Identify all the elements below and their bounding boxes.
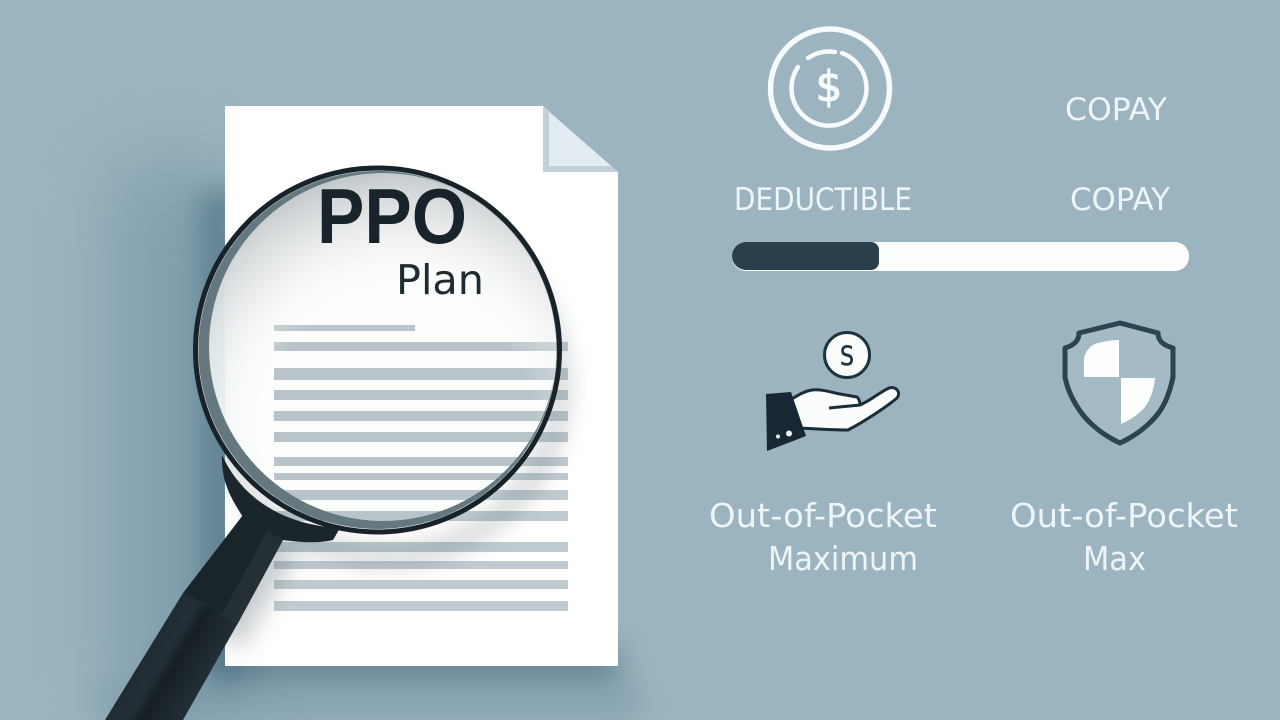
label: copay top: COPAY — [1065, 92, 1167, 128]
label: out-of-pocket max: Out-of-Pocket — [1010, 496, 1238, 535]
icon: dollar coin: $ — [816, 62, 842, 111]
label: out-of-pocket maximum — [709, 496, 937, 578]
title: PPO: PPO — [317, 172, 467, 260]
progress bar — [732, 242, 1189, 271]
label: out-of-pocket maximum: Maximum — [768, 539, 918, 578]
label: copay: COPAY — [1070, 182, 1170, 218]
handle collar — [222, 455, 340, 542]
label: deductible: DEDUCTIBLE — [734, 182, 912, 218]
coin: S — [840, 341, 854, 372]
document page — [225, 106, 618, 666]
folded corner — [543, 106, 618, 172]
label: out-of-pocket maximum: Out-of-Pocket — [709, 496, 937, 535]
text lines on the document — [274, 325, 568, 611]
subtitle: Plan: Plan — [396, 256, 484, 304]
icon: dollar coin — [770, 29, 890, 148]
magnifier ring — [196, 168, 560, 532]
magnifier lens — [198, 170, 557, 496]
magnifier shadow on the document — [225, 286, 580, 655]
label: out-of-pocket max — [1010, 496, 1238, 578]
hand — [790, 388, 899, 430]
label: out-of-pocket max: Max — [1083, 539, 1146, 578]
document shadow — [100, 170, 640, 720]
shield quadrants — [1084, 340, 1155, 424]
magnifier handle — [105, 455, 340, 720]
cuff buttons — [776, 430, 792, 438]
icon: shield — [1065, 323, 1173, 443]
thumb fold — [829, 405, 860, 408]
icon: hand with coin — [766, 332, 899, 451]
cuff — [766, 392, 806, 451]
